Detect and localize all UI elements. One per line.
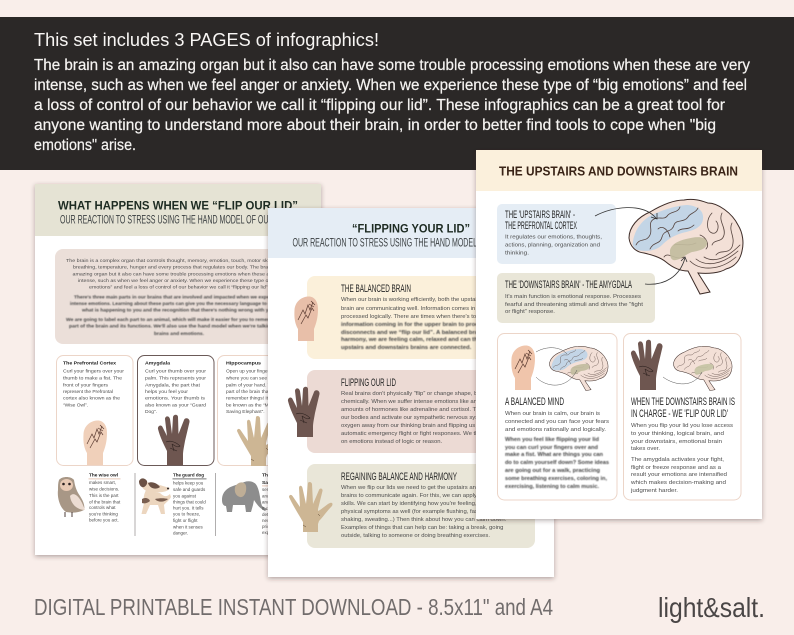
card: when the downstairs brain is in charge: The amygdala activates your fight, [631, 457, 724, 463]
text: the wise owl: controls what [89, 505, 116, 510]
box: upstairs brain: THE 'UPSTAIRS BRAIN' - [505, 209, 575, 221]
card: hippocampus: remember things! It can [226, 396, 278, 402]
box: regaining balance and harmony: skills. We can start by identifying how you're feeling, noticing [341, 501, 499, 507]
page 1 intro box: intense, such as when we feel anger or anxiety. When we experience these type of “big [78, 278, 280, 284]
page 2 header: OUR REACTION TO STRESS USING THE HAND MODEL OF OUR BRAIN [292, 238, 530, 250]
card: a balanced mind: are going out for a walk, practicing [505, 468, 600, 474]
icon: light hand [289, 482, 332, 532]
page 1 header: OUR REACTION TO STRESS USING THE HAND MODEL OF OUR BRAIN [60, 214, 297, 226]
banner paragraph: a loss of control of our behavior we call it “flipping our lid”. These infographics can be a great tool for [34, 97, 725, 114]
text: the wise owl: The wise owl [89, 473, 119, 479]
text: the guard dog: things that could [173, 499, 206, 504]
page 3 header: THE UPSTAIRS AND DOWNSTAIRS BRAIN [499, 164, 738, 178]
banner paragraph: intense, such as when we feel anger or anxiety. When we experience these type of “big emotions” and feel [34, 77, 747, 94]
card: when the downstairs brain is in charge: result your emotions are intensified [631, 472, 727, 478]
text: the guard dog: The guard dog [173, 473, 204, 479]
box: the balanced brain: When our brain is working efficiently, both the upstairs and downstairs [341, 297, 523, 303]
page 1 intro box: intense emotions. Learning about these parts can give you the necessary language to describe [70, 301, 288, 307]
card: hippocampus [218, 356, 294, 466]
icon: fist [294, 296, 318, 341]
card: hippocampus: Hippocampus [226, 361, 261, 367]
box: regaining balance and harmony: brains to communicate again. For this, we can apply some coping [341, 493, 512, 499]
card: the prefrontal cortex: represent the Prefrontal [63, 389, 113, 395]
text: the memory elephant: Saving [262, 480, 278, 486]
panel: page 2, flipping your lid [268, 208, 554, 577]
box: downstairs brain [497, 273, 655, 323]
icon: fist [83, 420, 107, 465]
text: the memory elephant: prior [262, 524, 272, 529]
box: upstairs brain: actions, planning, organization and [505, 243, 600, 249]
card: hippocampus: Saving Elephant”. [226, 409, 265, 415]
text: the wise owl: before you act. [89, 517, 119, 522]
icon: fist [511, 345, 535, 390]
box: regaining balance and harmony: When we flip our lids we need to get the upstairs and downstairs [341, 485, 509, 491]
card: the prefrontal cortex: thumb to make a fist. The [63, 376, 122, 382]
box: upstairs brain: It regulates our emotions, thoughts, [505, 235, 602, 241]
card: a balanced mind: exercising, listening to calm music. [505, 484, 599, 490]
card: amygdala: also known as your “Guard [145, 402, 206, 408]
box: flipping our lid: automatic emergency flight or fight responses. We then act [341, 431, 495, 437]
card: amygdala: emotions. Your thumb is [145, 396, 206, 402]
footer: brand logo: light&salt. [658, 592, 765, 623]
page 1 intro box: emotions” and feel a loss of control of our behavior we call it “flipping our lid”. [89, 285, 269, 291]
page 1 intro box: what is happening to you and the recognition that there's nothing wrong with you. [81, 308, 277, 314]
box: flipping our lid: FLIPPING OUR LID [341, 377, 396, 389]
page 1 header [35, 184, 321, 236]
text: the wise owl: of the brain that [89, 499, 121, 504]
page 2 header: “FLIPPING YOUR LID” [352, 222, 470, 236]
banner paragraph: emotions" arise. [34, 137, 136, 154]
box: downstairs brain: THE 'DOWNSTAIRS BRAIN' - THE AMYGDALA [505, 279, 632, 291]
box: the balanced brain: disconnects and we “flip our lid”. A balanced brain means we feel in [341, 330, 532, 336]
box: upstairs brain [497, 204, 616, 264]
box: regaining balance and harmony: outside, talking to someone or doing breathing exercises. [341, 533, 490, 539]
text: the wise owl: makes smart, [89, 480, 116, 485]
page 1 intro box [55, 249, 303, 344]
card: a balanced mind: you can curl your fingers over and [505, 445, 598, 451]
box: regaining balance and harmony [289, 464, 535, 548]
card: hippocampus: part of the brain that helps [226, 389, 283, 395]
page 2 header [268, 208, 554, 258]
illustration: small brain with both regions [550, 346, 608, 391]
box: flipping our lid: Real brains don't physically “flip” or change shape, but they do change [341, 391, 525, 397]
card: a balanced mind: connected and you can face your fears [505, 419, 609, 425]
text: the wise owl: you're thinking [89, 511, 118, 516]
arrow: upstairs box to prefrontal cortex [595, 208, 657, 219]
box: flipping our lid: on emotions instead of logic or reason. [341, 439, 443, 445]
text: the guard dog: you against [173, 493, 197, 498]
card: a balanced mind: and emotions rationally and logically. [505, 427, 606, 433]
text: the memory elephant: exp [262, 530, 270, 535]
card: when the downstairs brain is in charge: takes over. [631, 446, 660, 452]
box: regaining balance and harmony: shaking, sweating...) Then think about how you can calm down. [341, 517, 507, 523]
card: amygdala: Amygdala, the part that [145, 382, 201, 388]
icon: dark hand [288, 387, 320, 437]
banner paragraph [34, 57, 750, 154]
box: the balanced brain: information coming in for the upper brain to process, so it [341, 322, 504, 328]
banner heading: This set includes 3 PAGES of infographics! [34, 30, 379, 50]
illustration: small brain with amygdala [674, 346, 732, 391]
box: the balanced brain: processed logically. There are times when there's too much [341, 314, 495, 320]
illustration: large brain [629, 199, 743, 294]
box: the balanced brain [294, 276, 535, 359]
card: the prefrontal cortex [56, 356, 133, 466]
card: when the downstairs brain is in charge: which makes decision-making and [630, 480, 726, 486]
card: amygdala: Curl your thumb over your [145, 369, 206, 375]
text: the memory elephant: new [262, 518, 271, 523]
card: a balanced mind: some breathing exercises, coloring in, [505, 476, 607, 482]
text: the memory elephant: The memory [262, 473, 291, 479]
card: when the downstairs brain is in charge [624, 334, 741, 500]
text: the memory elephant: It can [262, 506, 274, 511]
card: when the downstairs brain is in charge: judgment harder. [630, 488, 678, 494]
panel: page 1, what happens when we flip our lid [35, 184, 321, 555]
page 1 intro box: part of the brain and its functions. We'll also use the hand model when we're talking about [69, 324, 289, 330]
divider lines [135, 473, 216, 536]
box: upstairs brain: THE PREFRONTAL CORTEX [505, 220, 577, 232]
card: hippocampus: palm of your hand. This is the [226, 382, 290, 388]
box: flipping our lid [288, 370, 540, 453]
text: the memory elephant: details [262, 512, 276, 517]
page 1 intro box: There's three main parts in our brains that are involved and impacted when we experience [74, 294, 284, 300]
icon: elephant [222, 481, 267, 512]
text: the wise owl: wise decisions. [89, 487, 119, 492]
card: when the downstairs brain is in charge: your downstairs, emotional brain [631, 439, 722, 445]
footer: download note: DIGITAL PRINTABLE INSTANT DOWNLOAD - 8.5x11" and A4 [34, 594, 553, 620]
card: a balanced mind: When our brain is calm, our brain is [505, 411, 600, 417]
box: flipping our lid: our bodies and activate our sympathetic nervous system, taking [341, 415, 507, 421]
card: hippocampus: Open up your fingers to a [226, 369, 281, 375]
text: the memory elephant: and [262, 500, 270, 505]
text: the guard dog: hurt you. It tells [173, 506, 204, 511]
text: the guard dog: fight or flight [173, 518, 198, 523]
page 1 intro box: We are going to label each part to an animal, which will make it easier for you to remember each [66, 317, 292, 323]
box: regaining balance and harmony: physical symptoms as well (for example flushing, fast heart rate, [341, 509, 508, 515]
card: when the downstairs brain is in charge: to your thinking, logical brain, and [631, 431, 724, 437]
box: the balanced brain: harmony, we are feeling calm, relaxed and can think. Our [341, 337, 501, 343]
card: a balanced mind: When you feel like flipping your lid [505, 437, 599, 443]
icon: dark hand [158, 415, 190, 465]
card: a balanced mind [498, 334, 617, 500]
icon: light hand [237, 416, 280, 466]
card: the prefrontal cortex: cortex also known as the [63, 396, 120, 402]
text: the memory elephant: senses [262, 487, 277, 492]
box: regaining balance and harmony: Examples of things that can help can be: taking a break, going [341, 525, 503, 531]
box: the balanced brain: upstairs and downstairs brains are connected. [341, 345, 472, 351]
text: the memory elephant [262, 473, 291, 535]
banner paragraph: anyone wanting to understand more about their brain, in order to better find tools to cope when "big [34, 117, 716, 134]
box: regaining balance and harmony: REGAINING BALANCE AND HARMONY [341, 471, 457, 483]
text: the guard dog: helps keep you [173, 480, 204, 485]
card: when the downstairs brain is in charge: IN CHARGE - WE 'FLIP OUR LID' [631, 408, 728, 420]
icon: dark hand [631, 340, 663, 390]
text: the memory elephant: and [262, 493, 270, 498]
box: flipping our lid: amounts of hormones like adrenaline and cortisol. These chemicals flood [341, 407, 531, 413]
banner paragraph: The brain is an amazing organ but it also can have some trouble processing emotions when these are very [34, 57, 750, 74]
card: a balanced mind: do to calm yourself down? Some ideas [505, 460, 610, 466]
banner: intro text [0, 17, 794, 170]
text: the guard dog: you to freeze, [173, 512, 200, 517]
card: hippocampus: be known as the “Memory [226, 402, 283, 408]
card: a balanced mind: make a fist. What are things you can [505, 452, 603, 458]
card: the prefrontal cortex: front of your fingers [63, 382, 109, 388]
box: flipping our lid: oxygen away from our thinking brain and flipping us into [341, 423, 487, 429]
icon: owl [58, 477, 85, 517]
box: the balanced brain: THE BALANCED BRAIN [341, 283, 411, 295]
box: the balanced brain: brain are communicating well. Information comes in and it's shared and [341, 306, 526, 312]
text: the guard dog: danger. [173, 530, 188, 535]
page 1 header: WHAT HAPPENS WHEN WE “FLIP OUR LID” [58, 198, 298, 212]
card: amygdala: helps you feel your [145, 389, 188, 395]
arrow: hand to amygdala [663, 372, 702, 384]
box: downstairs brain: or flight” response. [505, 309, 555, 315]
box: downstairs brain: It's main function is emotional response. Processes [505, 294, 641, 300]
page 1 intro box: brains and emotions. [154, 331, 205, 337]
card: when the downstairs brain is in charge: When you flip your lid you lose access [631, 423, 733, 429]
icon: dog [139, 478, 171, 514]
text: the wise owl [88, 473, 121, 522]
card: the prefrontal cortex: “Wise Owl”. [63, 402, 88, 408]
page 1 intro box: The brain is a complex organ that controls thought, memory, emotion, touch, motor skills, vision, [66, 258, 292, 264]
card: hippocampus: where you can see the [226, 376, 275, 382]
card: amygdala [138, 356, 214, 466]
card: when the downstairs brain is in charge: flight or freeze response and as a [631, 465, 722, 471]
arrows: fist to brain [536, 348, 577, 385]
page 1 intro box: amazing organ but it also can have some trouble processing emotions when these are very [72, 271, 286, 277]
text: the wise owl: This is the part [89, 493, 119, 498]
card: amygdala: palm. This represents your [145, 376, 206, 382]
box: upstairs brain: thinking. [505, 251, 529, 257]
page 1 intro box: breathing, temperature, hunger and every process that regulates our body. The brain is an [73, 265, 285, 271]
card: the prefrontal cortex: Curl your fingers over your [63, 369, 124, 375]
text: the guard dog: safe and guards [173, 487, 206, 492]
card: a balanced mind: A BALANCED MIND [505, 396, 564, 408]
card: amygdala: Dog”. [145, 409, 157, 415]
arrow: downstairs box to amygdala [645, 257, 687, 284]
box: flipping our lid: chemically. When we suffer intense emotions like anger, our brains get large [341, 399, 540, 405]
card: amygdala: Amygdala [145, 361, 170, 367]
box: downstairs brain: fearful and threatening stimuli and drives the “fight [505, 302, 643, 308]
panel: page 3, the upstairs and downstairs brain [476, 150, 762, 519]
text: the guard dog [172, 473, 206, 535]
page 3 header [476, 150, 762, 191]
card: the prefrontal cortex: The Prefrontal Cortex [63, 361, 116, 367]
text: the guard dog: when it senses [173, 524, 204, 529]
